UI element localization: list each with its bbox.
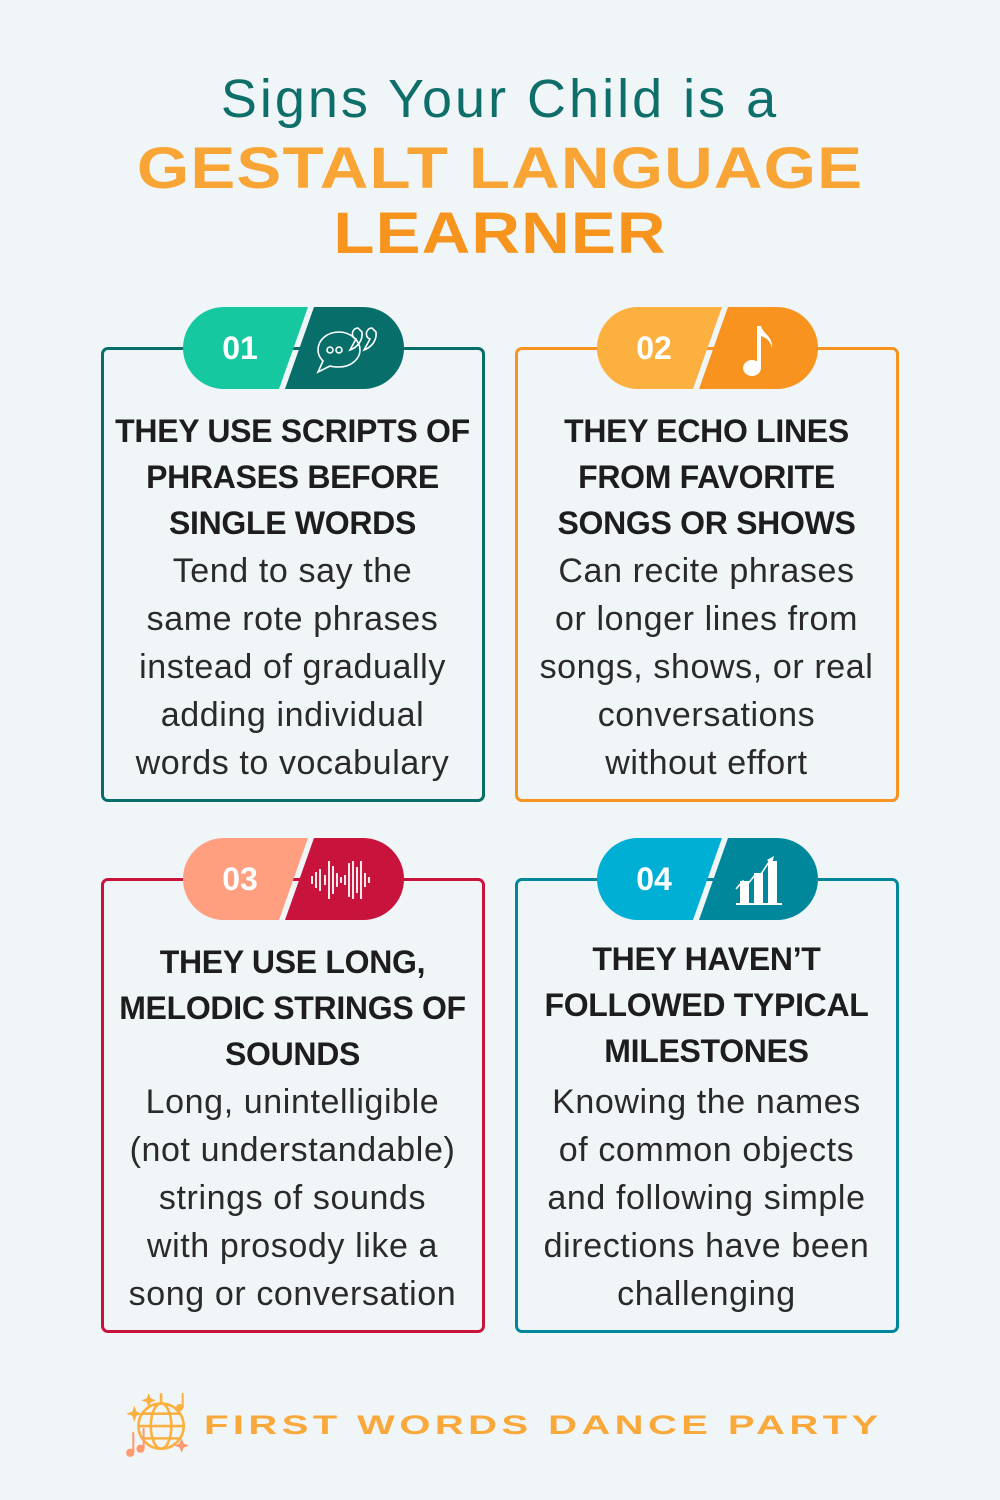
body 03: Long, unintelligible <box>146 1083 439 1121</box>
body 04: challenging <box>617 1275 796 1313</box>
body 01: adding individual <box>161 696 424 734</box>
text: GESTALT LANGUAGE <box>137 136 863 201</box>
heading 04 <box>544 941 869 1069</box>
icon: disco globe <box>126 1393 189 1457</box>
heading 01: SINGLE WORDS <box>169 505 416 541</box>
body 01 <box>136 552 449 782</box>
badge 02 <box>597 307 818 389</box>
body 01: words to vocabulary <box>136 744 449 782</box>
body 04 <box>544 1083 869 1313</box>
heading 02: THEY ECHO LINES <box>564 413 849 449</box>
panel: card 01 <box>101 347 485 802</box>
body 02: or longer lines from <box>555 600 858 638</box>
body 03: (not understandable) <box>130 1131 455 1169</box>
heading 02: FROM FAVORITE <box>578 459 835 495</box>
body 01: same rote phrases <box>147 600 438 638</box>
body 02: without effort <box>605 744 808 782</box>
heading 02 <box>557 413 856 541</box>
panel: card 02 <box>515 347 899 802</box>
body 04: of common objects <box>559 1131 854 1169</box>
text: LEARNER <box>333 201 667 266</box>
heading 02: SONGS OR SHOWS <box>557 505 856 541</box>
heading 03 <box>119 944 466 1072</box>
body 03: strings of sounds <box>159 1179 426 1217</box>
heading 04: FOLLOWED TYPICAL <box>544 987 869 1023</box>
heading 03: MELODIC STRINGS OF <box>119 990 466 1026</box>
body 03: with prosody like a <box>147 1227 438 1265</box>
footer logo <box>126 1393 883 1457</box>
body 04: and following simple <box>547 1179 866 1217</box>
badge 04 <box>597 838 818 920</box>
body 04: directions have been <box>544 1227 869 1265</box>
heading 01 <box>115 413 470 541</box>
badge 02: 02 <box>636 330 672 366</box>
body 02: Can recite phrases <box>558 552 855 590</box>
heading 03: SOUNDS <box>225 1036 360 1072</box>
body 02 <box>540 552 873 782</box>
body 03: song or conversation <box>129 1275 456 1313</box>
heading 04: MILESTONES <box>604 1033 809 1069</box>
body 03 <box>129 1083 456 1313</box>
body 01: Tend to say the <box>173 552 412 590</box>
badge 03: 03 <box>222 861 258 897</box>
text: Signs Your Child is a <box>221 69 779 129</box>
heading 01: THEY USE SCRIPTS OF <box>115 413 470 449</box>
panel: card 03 <box>101 878 485 1333</box>
heading 04: THEY HAVEN’T <box>592 941 821 977</box>
body 02: conversations <box>598 696 815 734</box>
badge 04: 04 <box>636 861 672 897</box>
brand name: FIRST WORDS DANCE PARTY <box>204 1410 883 1440</box>
badge 01 <box>183 307 404 389</box>
heading 01: PHRASES BEFORE <box>146 459 439 495</box>
badge 03 <box>183 838 404 920</box>
badge 01: 01 <box>222 330 258 366</box>
body 01: instead of gradually <box>139 648 446 686</box>
title <box>137 69 863 266</box>
body 02: songs, shows, or real <box>540 648 873 686</box>
heading 03: THEY USE LONG, <box>160 944 425 980</box>
panel: card 04 <box>515 878 899 1333</box>
body 04: Knowing the names <box>552 1083 861 1121</box>
